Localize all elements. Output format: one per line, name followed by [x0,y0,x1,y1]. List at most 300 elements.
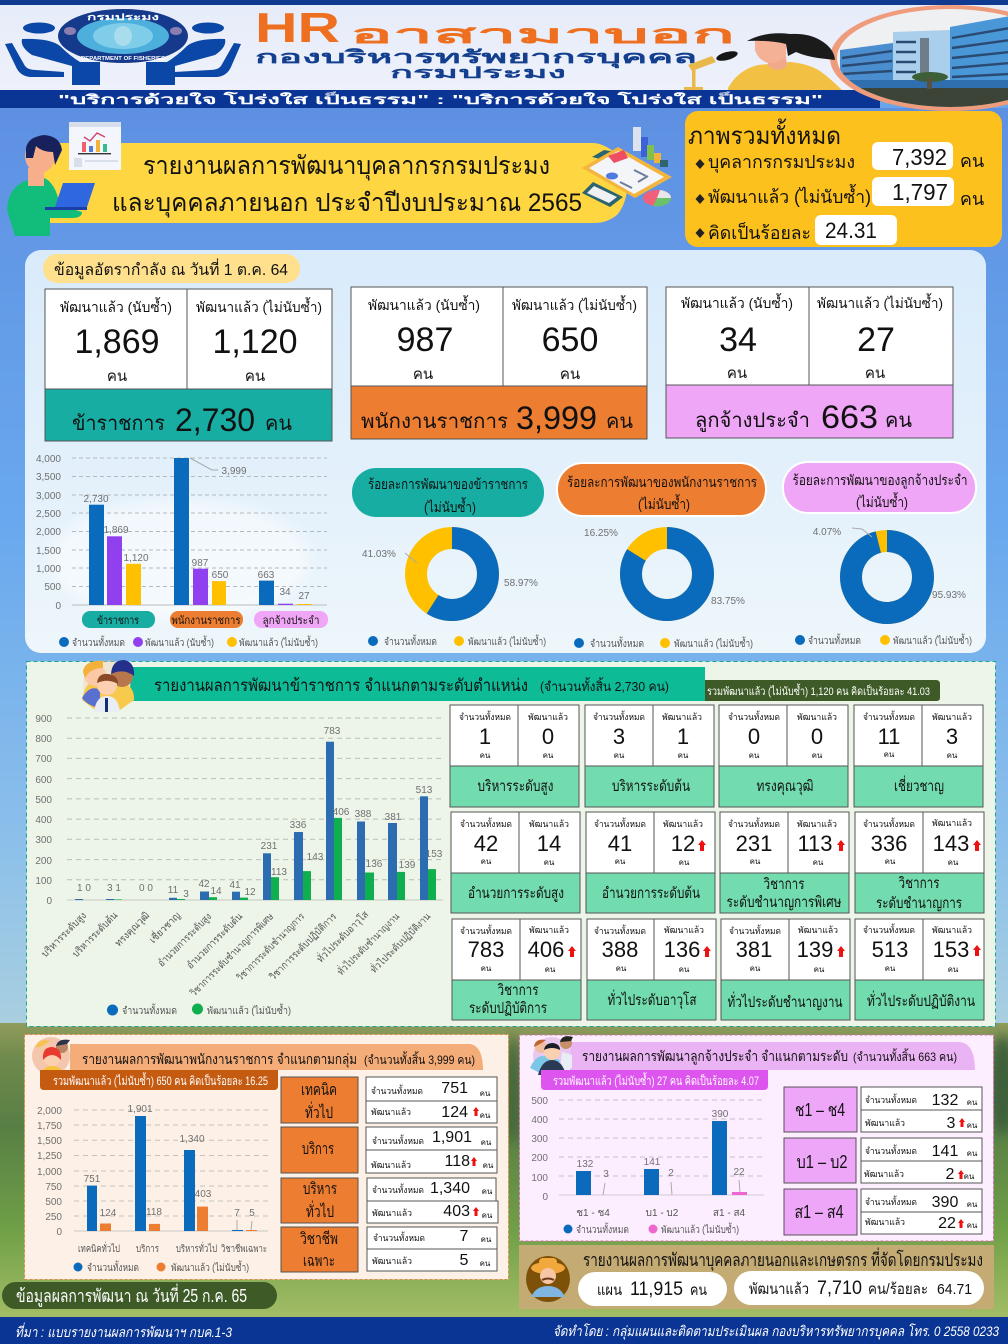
icon: three workers [530,1036,573,1075]
card: specialist: คน [884,750,895,759]
legend: จำนวนทั้งหมด [72,635,125,649]
bar chart: by group: 124 [100,1208,117,1219]
legend: พัฒนาแล้ว (ไม่นับซ้ำ) [171,1260,249,1274]
card: government employees: 987 [397,321,453,359]
illustration: woman with microphone [684,33,842,90]
table: service: จำนวนทั้งหมด [372,1134,424,1146]
bar chart: by group: 1,500 [37,1136,62,1147]
card: civil servants: พัฒนาแล้ว (นับซ้ำ) [60,297,172,315]
table: level s1-s4: ส1 – ส4 [794,1202,844,1222]
table: professional specific: พัฒนาแล้ว [372,1256,412,1266]
stat: percent: คิดเป็นร้อยละ [708,221,811,243]
card: expert qualified [728,710,837,796]
bar chart: workforce by type: 2,730 [83,494,109,505]
panel: overall summary [685,111,1002,247]
panel: workforce data [25,250,986,653]
card: academic senior professional: วิชาการ [763,876,804,893]
table: technical general: จำนวนทั้งหมด [371,1084,423,1096]
bar chart: by level: บริหารระดับต้น [70,910,120,960]
table: service: พัฒนาแล้ว [371,1160,411,1170]
card: executive entry: 1 [677,724,689,749]
bar chart: workforce by type [36,454,328,649]
card: academic senior professional: คน [750,857,761,866]
table: general administration: คน [482,1187,493,1196]
table: technical general: เทคนิค [301,1082,337,1099]
card: director high: 42 [474,831,498,856]
card: general operational: คน [948,965,959,974]
heading bar [70,1044,483,1070]
card: executive entry: พัฒนาแล้ว [662,712,702,722]
card: general senior: 136 [664,937,700,962]
bar chart: by level: บริหารระดับสูง [40,910,89,960]
card: permanent workers: พัฒนาแล้ว (ไม่นับซ้ำ) [817,293,943,311]
card: general senior: พัฒนาแล้ว [664,925,704,935]
card: director high: 14 [537,831,561,856]
bar chart: by level: 41 [229,880,241,891]
table: level s1-s4: คน [967,1200,978,1209]
legend: พัฒนาแล้ว (นับซ้ำ) [145,635,214,649]
card: director high: คน [544,858,555,867]
bar chart: by level: 600 [35,775,52,786]
bar chart: workforce by type: 4,000 [36,454,61,465]
bar chart: by level: 139 [399,860,416,871]
bar chart: by level: 0 [542,1192,548,1203]
callout: total developed [40,1070,278,1090]
bar chart: workforce by type: 1,500 [36,546,61,557]
heading bar: (จำนวนทั้งสิ้น 3,999 คน) [364,1051,475,1067]
donut chart: government employees: ร้อยละการพัฒนาของพนักงานราชการ [567,474,757,490]
card: executive high: 0 [542,724,554,749]
bar chart: workforce by type: 650 [212,570,229,581]
table: level ch1-ch4: ช1 – ช4 [795,1100,845,1120]
label pill: civil servants [82,611,155,628]
card: expert qualified: 0 [748,724,760,749]
bar chart: by group: บริหารทั่วไป [176,1241,217,1255]
card: director entry: คน [679,858,690,867]
card: specialist: คน [947,751,958,760]
title: HR อาสามาบอก: HR [255,4,340,51]
bar chart: by level: 3 [603,1169,609,1180]
card: academic practitioner: 783 [468,937,504,962]
bar chart: by level: 783 [324,726,341,737]
stat: percent: 24.31 [825,218,877,243]
card: academic senior professional: ระดับชำนาญการพิเศษ [726,894,842,911]
bar chart: workforce by type: 1,000 [36,564,61,575]
label pill: permanent workers [254,611,328,628]
header banner [0,0,1008,115]
card: director high: คน [481,857,492,866]
icon: three employees [32,1037,70,1076]
card: general operational: พัฒนาแล้ว [932,925,972,935]
bar chart: by level: อำนวยการระดับต้น [184,911,245,971]
table: technical general: ทั่วไป [305,1101,333,1122]
bar chart: by level [531,1096,764,1236]
bar chart: by level: 400 [531,1115,548,1126]
card: director entry: พัฒนาแล้ว [663,819,703,829]
bar chart: by level: วิชาการระดับปฏิบัติการ [267,911,340,983]
table: level s1-s4: จำนวนทั้งหมด [865,1195,917,1207]
card: specialist: พัฒนาแล้ว [932,712,972,722]
donut chart: civil servants: 58.97% [504,578,538,589]
table: professional specific: คน [481,1235,492,1244]
badge: data date [43,254,300,283]
panel: permanent workers by level [520,1035,994,1241]
bar chart: by level: 132 [577,1159,594,1170]
bar chart: workforce by type: 500 [44,582,61,593]
bar chart: workforce by type: 987 [192,558,209,569]
bar chart: by level: บ1 - บ2 [646,1208,679,1219]
bar chart: by group: 5 [249,1208,255,1219]
label pill: government employees: พนักงานราชการ [172,615,241,627]
card: academic practitioner: จำนวนทั้งหมด [460,924,512,936]
donut chart: permanent workers [783,462,976,647]
bar chart: by group: 500 [45,1197,62,1208]
table: professional specific: วิชาชีพ [300,1230,338,1248]
table: service: 118 [444,1153,470,1170]
card: general operational: จำนวนทั้งหมด [863,923,915,935]
card: expert qualified: คน [749,751,760,760]
bar chart: by level: 141 [644,1157,661,1168]
table: general administration: คน [482,1211,493,1220]
donut chart: permanent workers: จำนวนทั้งหมด [808,633,861,647]
card: director entry: อำนวยการระดับต้น [602,885,700,902]
bar chart: by level: 300 [35,835,52,846]
donut chart: government employees: (ไม่นับซ้ำ) [638,494,690,512]
card: general operational: 153 [933,937,969,962]
table: level s1-s4: พัฒนาแล้ว [865,1217,905,1227]
table: level ch1-ch4 [784,1087,982,1132]
table: technical general: คน [480,1089,491,1098]
bar chart: by group: 751 [84,1174,101,1185]
card: director high: พัฒนาแล้ว [529,819,569,829]
card: government employees: คน [560,366,580,383]
card: government employees: คน [606,411,633,433]
legend: พัฒนาแล้ว (ไม่นับซ้ำ) [207,1003,291,1017]
card: permanent workers [666,287,953,438]
icon: two seated figures [5,22,241,85]
card: civil servants: พัฒนาแล้ว (ไม่นับซ้ำ) [196,297,322,315]
card: executive entry: 3 [613,724,625,749]
card: academic practitioner: ระดับปฏิบัติการ [469,1000,547,1017]
bar chart: by level: 153 [426,849,443,860]
table: service: คน [481,1138,492,1147]
card: permanent workers: 27 [857,321,895,359]
table: service: 1,901 [432,1129,472,1146]
bar chart: by level: 22 [733,1167,745,1178]
bar chart: by level: 700 [35,754,52,765]
stat: developed: พัฒนาแล้ว [749,1281,809,1298]
card: academic senior professional: จำนวนทั้งหมด [728,817,780,829]
card: general skilled: จำนวนทั้งหมด [729,924,781,936]
bar chart: by group: 0 [56,1227,62,1238]
card: government employees: 650 [542,321,598,359]
card: general senior: คน [679,965,690,974]
badge: data date: ข้อมูลอัตรากำลัง ณ วันที่ 1 ต.ค. 64 [54,258,288,280]
stat: developed: 64.71 [937,1281,972,1298]
card: academic professional: จำนวนทั้งหมด [863,817,915,829]
stat: personnel total [696,142,984,173]
heading bar [130,667,705,701]
bar chart: by level: 11 [168,885,179,896]
table: professional specific: คน [480,1259,491,1268]
stat: personnel total: คน [960,151,984,171]
table: level s1-s4: 22 [938,1215,956,1232]
heading: overview: ภาพรวมทั้งหมด [688,118,841,150]
card: general senior: ทั่วไประดับอาวุโส [608,989,696,1010]
banner: report title: และบุคคลภายนอก ประจำปีงบประมาณ 2565 [112,189,582,218]
stat: plan [578,1272,727,1306]
table: level ch1-ch4: คน [967,1098,978,1107]
bar chart: by level: ส1 - ส4 [713,1208,746,1219]
table: level b1-b2: คน [967,1149,978,1158]
card: expert qualified: พัฒนาแล้ว [797,712,837,722]
table: technical general: พัฒนาแล้ว [371,1107,411,1117]
bar chart: by level: 231 [261,841,278,852]
bar chart: by group: 750 [45,1182,62,1193]
card: academic senior professional: 113 [797,831,833,856]
heading bar: รายงานผลการพัฒนาข้าราชการ จำแนกตามระดับตำแหน่ง [154,676,528,695]
stat: percent [696,215,897,245]
table: technical general [281,1077,497,1123]
stat: personnel total: 7,392 [892,144,947,170]
card: permanent workers: ลูกจ้างประจำ [695,410,810,433]
callout: total developed: รวมพัฒนาแล้ว (ไม่นับซ้ำ) 1,120 คน คิดเป็นร้อยละ 41.03 [707,683,930,698]
donut chart: permanent workers: 4.07% [813,527,841,538]
card: government employees [351,287,647,439]
card: academic senior professional [726,817,845,911]
bar chart: by group: 250 [45,1212,62,1223]
card: executive high: พัฒนาแล้ว [528,712,568,722]
card: executive high: คน [543,751,554,760]
stat: plan: 11,915 [630,1279,683,1300]
bar chart: by level: 2 [668,1168,674,1179]
legend: จำนวนทั้งหมด [576,1222,629,1236]
callout: total developed [705,680,940,701]
table: technical general: 751 [441,1080,468,1097]
card: expert qualified: คน [812,751,823,760]
card: academic senior professional: 231 [736,831,772,856]
table: professional specific: 5 [460,1252,469,1269]
table: level b1-b2 [784,1138,982,1183]
slogan band: "บริการด้วยใจ โปร่งใส เป็นธรรม" : "บริการด้วยใจ โปร่งใส เป็นธรรม" [58,90,823,107]
heading bar: รายงานผลการพัฒนาลูกจ้างประจำ จำแนกตามระดับ [582,1048,848,1065]
card: general operational: ทั่วไประดับปฏิบัติงาน [867,990,975,1010]
badge: development data date [2,1282,277,1309]
bar chart: by level: 500 [35,795,52,806]
card: civil servants: 1,120 [212,323,298,361]
donut chart: civil servants: (ไม่นับซ้ำ) [424,497,476,515]
bar chart: by level: 300 [531,1134,548,1145]
card: executive high: จำนวนทั้งหมด [459,710,511,722]
table: general administration: จำนวนทั้งหมด [372,1183,424,1195]
legend [107,1003,291,1017]
legend: จำนวนทั้งหมด [87,1260,139,1274]
card: academic senior professional: คน [813,858,824,867]
callout: total developed [541,1070,768,1090]
card: director high [460,817,569,902]
card: executive entry [593,710,702,795]
donut chart: civil servants [352,468,546,648]
card: civil servants: 1,869 [74,323,160,361]
table: service: บริการ [302,1141,334,1158]
table: level b1-b2: จำนวนทั้งหมด [865,1144,917,1156]
card: civil servants: 2,730 [175,402,255,438]
bar chart: workforce by type: 663 [258,570,275,581]
label pill: permanent workers: ลูกจ้างประจำ [262,615,320,627]
card: civil servants: คน [265,413,292,435]
card: civil servants: คน [245,368,265,385]
icon: department of fisheries seal: DEPARTMENT OF FISHERIES [81,56,165,62]
bar chart: by group: วิชาชีพเฉพาะ [221,1243,267,1255]
card: permanent workers: คน [885,410,912,432]
card: general operational: คน [885,964,896,973]
donut chart: permanent workers: ร้อยละการพัฒนาของลูกจ้างประจำ [792,472,968,489]
subtitle: กรมประมง [390,65,566,82]
table: level ch1-ch4: 132 [932,1092,958,1109]
bar chart: by level: 200 [531,1153,548,1164]
card: general skilled: คน [814,965,825,974]
donut chart: civil servants: ร้อยละการพัฒนาของข้าราชการ [368,476,528,492]
stat: developed: 1,797 [892,179,948,205]
card: general senior: คน [616,964,627,973]
card: general operational [863,923,981,1010]
donut chart: government employees: 16.25% [584,528,618,539]
banner: report title [7,122,672,236]
table: general administration: ทั่วไป [306,1200,334,1221]
bar chart: by level: 500 [531,1096,548,1107]
heading bar: (จำนวนทั้งสิ้น 2,730 คน) [540,677,669,694]
subtitle [255,47,697,82]
card: academic professional: พัฒนาแล้ว [932,818,972,828]
table: level ch1-ch4: คน [967,1121,978,1130]
card: director entry: จำนวนทั้งหมด [594,817,646,829]
table: level b1-b2: พัฒนาแล้ว [864,1169,904,1179]
donut chart: civil servants: พัฒนาแล้ว (ไม่นับซ้ำ) [468,634,546,648]
bar chart: workforce by type: 3,000 [36,491,61,502]
card: executive high [459,710,568,795]
card: expert qualified: 0 [811,724,823,749]
bar chart: by group: บริการ [136,1244,159,1255]
icon: clipboard report [582,127,672,207]
stat: developed [696,177,984,209]
stat: developed: 7,710 [817,1278,862,1299]
source note: ที่มา : แบบรายงานผลการพัฒนาฯ กบค.1-3 [15,1322,232,1340]
title: HR อาสามาบอก: อาสามาบอก [350,19,735,49]
table: general administration [281,1178,498,1223]
bar chart: by level: ทั่วไประดับอาวุโส [313,907,371,965]
card: government employees: คน [413,366,433,383]
card: permanent workers: พัฒนาแล้ว (นับซ้ำ) [681,293,793,311]
donut chart: permanent workers: 95.93% [932,590,966,601]
card: expert qualified: ทรงคุณวุฒิ [756,778,814,796]
table: professional specific: 7 [460,1228,469,1245]
table: level b1-b2: 141 [932,1143,958,1160]
table: level b1-b2: บ1 – บ2 [796,1152,848,1172]
card: academic practitioner: 406 [528,937,564,962]
bar chart: by level: 12 [244,887,256,898]
table: general administration: บริหาร [303,1181,337,1198]
stat: developed: คน [960,189,984,209]
donut chart: government employees: พัฒนาแล้ว (ไม่นับซ้ำ) [674,636,753,650]
panel: civil servants by position level [26,660,996,1026]
card: government employees: พัฒนาแล้ว (นับซ้ำ) [368,295,480,313]
bar chart: by level: 1 0 [77,883,91,894]
donut chart: permanent workers: พัฒนาแล้ว (ไม่นับซ้ำ) [893,633,972,647]
table: general administration: พัฒนาแล้ว [372,1208,412,1218]
table: level ch1-ch4: 3 [947,1115,956,1132]
table: level b1-b2: คน [964,1172,975,1181]
bar chart: by level: วิชาการระดับชำนาญการ [235,911,307,984]
bar chart: by level: 800 [35,734,52,745]
callout: total developed: รวมพัฒนาแล้ว (ไม่นับซ้ำ) 27 คน คิดเป็นร้อยละ 4.07 [553,1072,759,1088]
table: level s1-s4: คน [967,1221,978,1230]
bar chart: by group: 403 [195,1189,212,1200]
table: technical general: คน [480,1111,491,1120]
card: general skilled: 139 [797,937,833,962]
donut chart: civil servants: จำนวนทั้งหมด [384,634,437,648]
bar chart: by level: 3 [183,889,189,900]
stat: developed [734,1271,984,1305]
donut chart: government employees [557,463,766,650]
card: academic practitioner: คน [481,964,492,973]
card: academic practitioner: พัฒนาแล้ว [529,925,569,935]
stat: plan: แผน [597,1282,622,1299]
bar chart: by level: 390 [712,1109,729,1120]
table: level s1-s4 [784,1189,982,1235]
card: general skilled: 381 [736,937,772,962]
panel: external persons and farmers [519,1245,994,1309]
legend [59,635,318,649]
bar chart: by group: 1,340 [179,1134,205,1145]
bar chart: by level: 3 1 [107,883,121,894]
bar chart: by group: 1,000 [37,1167,62,1178]
table: service: คน [483,1161,494,1170]
bar chart: by group: เทคนิคทั่วไป [78,1241,120,1255]
badge: development data date: ข้อมูลผลการพัฒนา ณ วันที่ 25 ก.ค. 65 [16,1283,247,1307]
heading bar: รายงานผลการพัฒนาพนักงานราชการ จำแนกตามกลุ่ม [82,1051,357,1068]
card: specialist: จำนวนทั้งหมด [863,710,915,722]
subtitle: กองบริหารทรัพยากรบุคคล [255,47,697,69]
bar chart: by level: 336 [290,820,307,831]
legend [74,1260,249,1274]
bar chart: by group: 1,250 [37,1151,62,1162]
legend: จำนวนทั้งหมด [122,1003,177,1017]
card: director entry: 41 [608,831,632,856]
bar chart: by level: 388 [355,809,372,820]
card: academic professional: 336 [871,831,907,856]
card: general senior [594,924,711,1010]
card: executive high: บริหารระดับสูง [478,778,554,795]
table: level b1-b2: 2 [946,1166,955,1183]
card: specialist: 3 [946,724,958,749]
bar chart: by level: 42 [198,879,210,890]
card: director entry [594,817,706,902]
heading bar: (จำนวนทั้งสิ้น 663 คน) [853,1048,957,1064]
table: professional specific: เฉพาะ [303,1253,335,1270]
legend: พัฒนาแล้ว (ไม่นับซ้ำ) [661,1222,739,1236]
card: civil servants: คน [107,368,127,385]
card: academic professional [863,817,981,912]
bar chart: by level: วิชาการระดับชำนาญการพิเศษ [188,911,276,999]
bar chart: workforce by type: 3,999 [221,466,247,477]
table: service [281,1127,497,1173]
stat: developed: พัฒนาแล้ว (ไม่นับซ้ำ) [708,184,871,207]
card: academic professional: คน [948,858,959,867]
card: government employees: พัฒนาแล้ว (ไม่นับซ้ำ) [512,295,637,313]
bar chart: workforce by type: 0 [55,601,61,612]
card: academic senior professional: พัฒนาแล้ว [797,819,837,829]
icon: person with laptop [7,135,95,236]
